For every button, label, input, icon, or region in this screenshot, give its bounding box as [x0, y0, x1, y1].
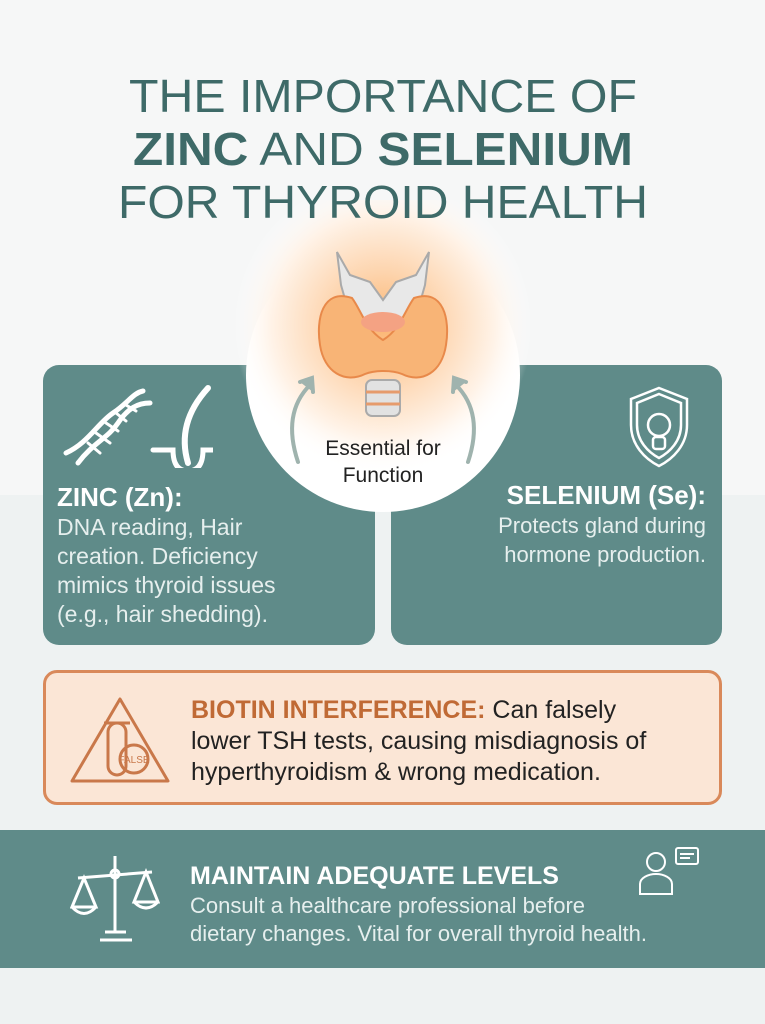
- selenium text: SELENIUM (Se):: [507, 480, 706, 510]
- title: THE IMPORTANCE OF: [129, 70, 637, 122]
- maintain text: MAINTAIN ADEQUATE LEVELS: [190, 862, 559, 890]
- callout: biotin: [43, 670, 722, 805]
- zinc text: (e.g., hair shedding).: [57, 601, 268, 627]
- selenium text: [498, 480, 706, 567]
- selenium text: hormone production.: [504, 542, 706, 567]
- arrows: [292, 378, 474, 462]
- label: essential for function: Essential for: [325, 437, 441, 460]
- maintain text: dietary changes. Vital for overall thyroid health.: [190, 921, 647, 946]
- thyroid circle: [240, 205, 526, 512]
- biotin text: lower TSH tests, causing misdiagnosis of: [191, 727, 646, 755]
- zinc text: mimics thyroid issues: [57, 572, 276, 598]
- icon: thyroid: [319, 252, 447, 416]
- biotin text: hyperthyroidism & wrong medication.: [191, 758, 601, 786]
- zinc text: ZINC (Zn):: [57, 482, 183, 512]
- title: [118, 70, 648, 228]
- zinc text: DNA reading, Hair: [57, 514, 242, 540]
- icon: warning test tube: FALSE: [118, 755, 150, 766]
- title: ZINC AND SELENIUM: [133, 123, 633, 175]
- zinc text: [57, 482, 276, 627]
- icon: scales: [70, 856, 160, 942]
- biotin text: [191, 696, 646, 786]
- icon: warning test tube: [70, 697, 170, 782]
- panel: zinc: [43, 365, 375, 645]
- icon: doctor chat: [639, 847, 699, 895]
- panel: selenium: [391, 365, 722, 645]
- maintain text: Consult a healthcare professional before: [190, 893, 585, 918]
- title: FOR THYROID HEALTH: [118, 176, 648, 228]
- panel: maintain levels: [0, 830, 765, 968]
- thyroid circle: Function: [343, 464, 423, 487]
- zinc text: creation. Deficiency: [57, 543, 258, 569]
- biotin text: BIOTIN INTERFERENCE: Can falsely: [191, 696, 616, 724]
- icon: shield: [630, 386, 688, 468]
- selenium text: Protects gland during: [498, 513, 706, 538]
- icon: dna and hair: [64, 385, 213, 468]
- maintain text: [190, 862, 647, 946]
